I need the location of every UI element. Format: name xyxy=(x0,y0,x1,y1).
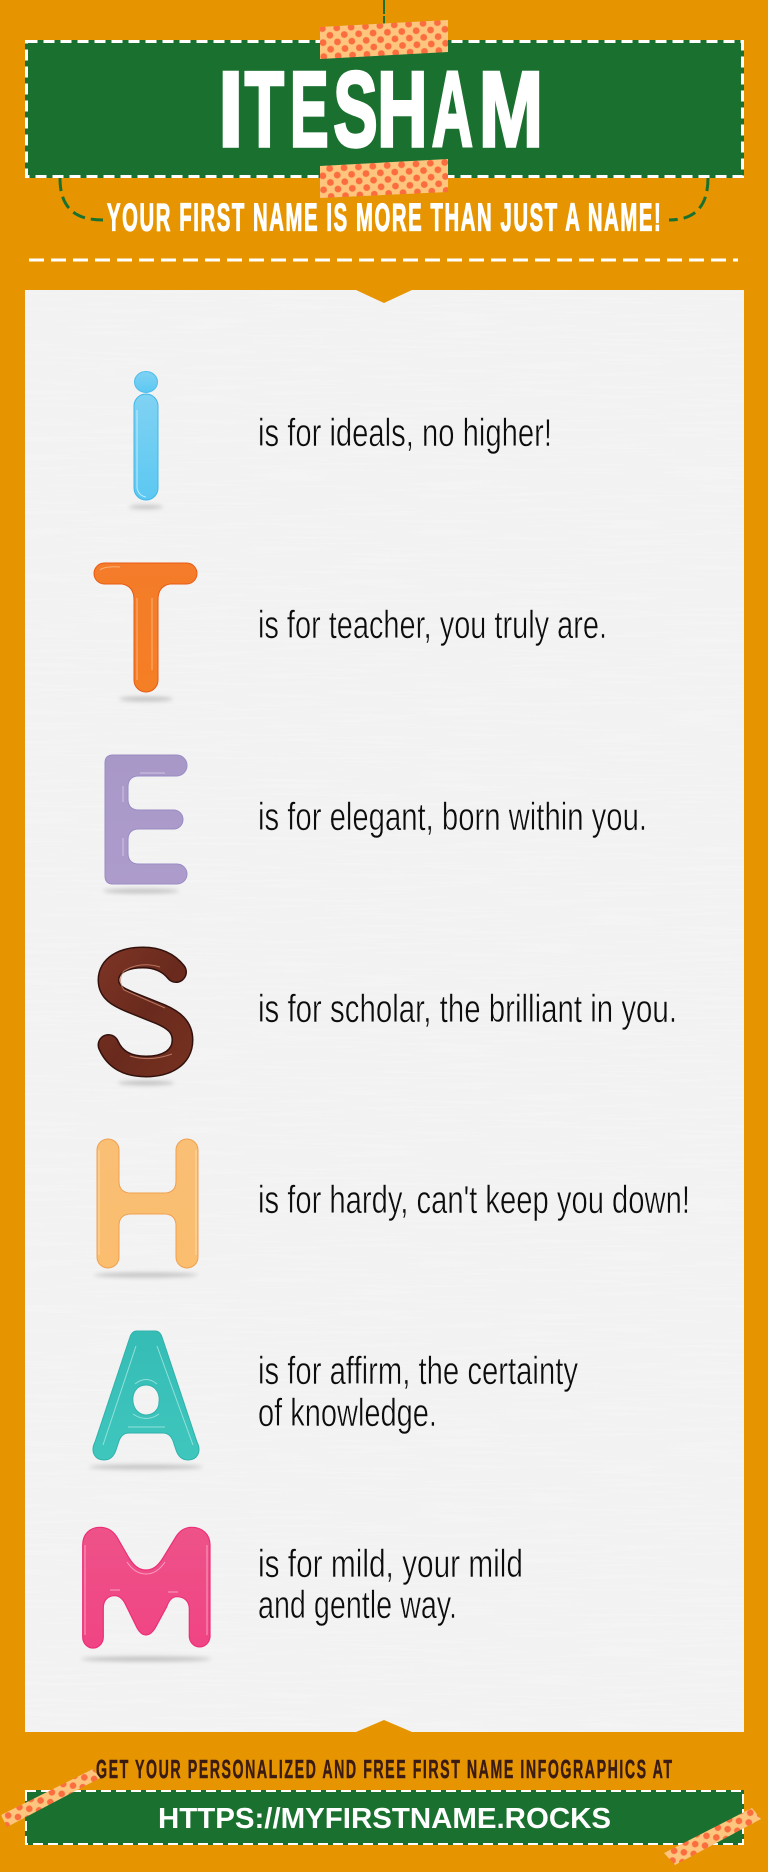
text I: is for ideals, no higher! xyxy=(258,412,552,455)
row: I xyxy=(129,372,552,509)
text M xyxy=(258,1543,523,1627)
bracket: right xyxy=(669,178,708,220)
title: T xyxy=(245,49,284,169)
row: T xyxy=(94,563,607,701)
subtitle: YOUR FIRST NAME IS MORE THAN JUST A NAME! xyxy=(107,195,661,239)
footer banner xyxy=(25,1790,744,1845)
title: I xyxy=(218,50,243,170)
text A xyxy=(258,1350,578,1435)
title: H xyxy=(377,50,427,170)
hanging line xyxy=(383,0,385,24)
row: H xyxy=(94,1139,690,1277)
tape: bottom xyxy=(320,159,448,198)
tape: footer left xyxy=(1,1769,100,1827)
title xyxy=(218,49,543,170)
tape: footer right xyxy=(664,1808,761,1865)
bracket: left xyxy=(60,178,103,220)
text A: of knowledge. xyxy=(258,1392,437,1435)
title: M xyxy=(479,50,543,169)
panel: letters xyxy=(25,290,744,1732)
url: HTTPS://MYFIRSTNAME.ROCKS xyxy=(158,1803,611,1835)
title banner xyxy=(25,40,744,178)
title: S xyxy=(333,49,378,169)
text A: is for affirm, the certainty xyxy=(258,1350,578,1393)
letter M xyxy=(81,1527,211,1662)
letter S xyxy=(108,958,182,1085)
letter T xyxy=(94,563,197,701)
letter A xyxy=(89,1331,203,1469)
letter I xyxy=(129,372,163,509)
title: E xyxy=(290,50,329,170)
footer call to action: GET YOUR PERSONALIZED AND FREE FIRST NAME INFOGRAPHICS AT xyxy=(96,1756,672,1784)
text M: and gentle way. xyxy=(258,1584,457,1627)
letter H xyxy=(94,1139,198,1277)
text M: is for mild, your mild xyxy=(258,1543,523,1586)
text E: is for elegant, born within you. xyxy=(258,796,647,839)
row: E xyxy=(103,755,647,893)
row: M xyxy=(81,1527,523,1662)
dashed divider xyxy=(29,258,738,262)
letter E xyxy=(103,755,187,893)
tape: top xyxy=(320,20,448,59)
row: S xyxy=(108,958,677,1085)
title: A xyxy=(432,50,473,170)
text T: is for teacher, you truly are. xyxy=(258,604,607,647)
row: A xyxy=(89,1331,578,1469)
